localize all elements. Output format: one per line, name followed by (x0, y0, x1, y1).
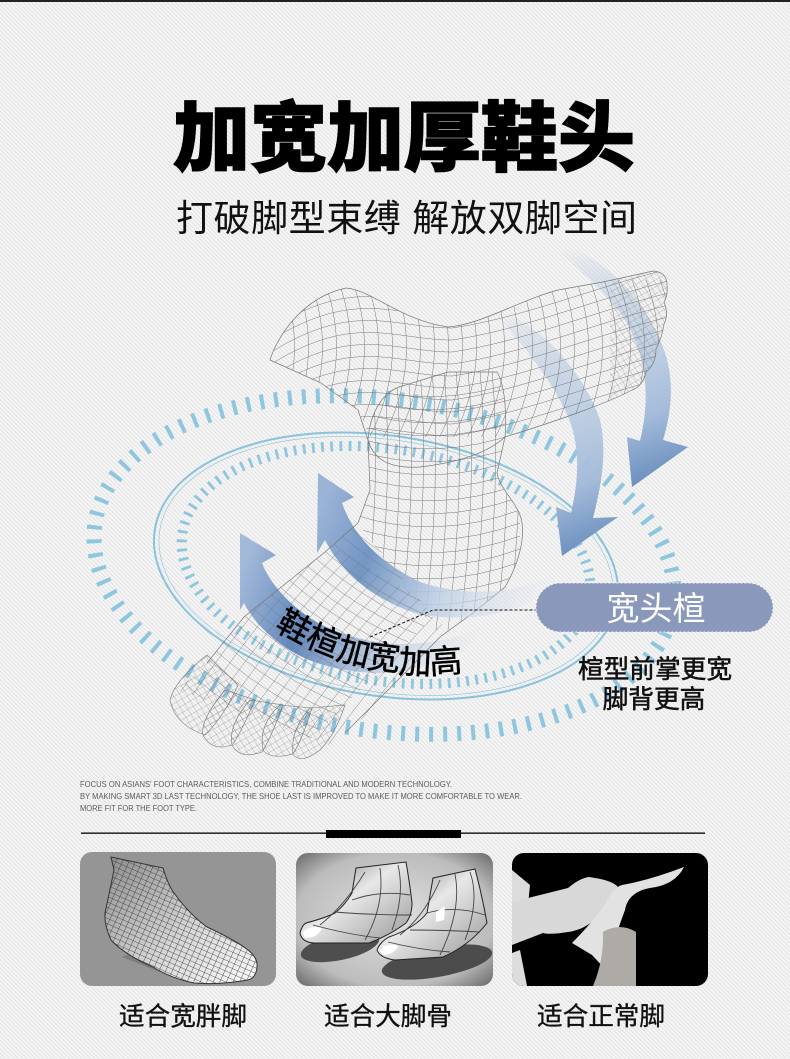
title: 加宽加厚鞋头 (173, 97, 635, 182)
panel: hand shaping last (512, 853, 708, 986)
english copy (80, 779, 522, 813)
panel: transparent boots (296, 853, 495, 986)
diagram: rings, foot, arrows (86, 254, 688, 759)
material (572, 867, 684, 970)
arrow: middle curved (317, 473, 558, 618)
callout pill: 宽头楦 (536, 583, 773, 632)
panel: wide foot last (80, 852, 276, 986)
left white strip (512, 870, 530, 986)
last shadow (122, 954, 162, 973)
arrow: lower curved (240, 533, 481, 673)
curved label: 鞋楦加宽加高: 鞋 (271, 603, 317, 651)
boot right (377, 869, 487, 960)
curved label: 鞋楦加宽加高: 加 (398, 643, 433, 682)
curved label: 鞋楦加宽加高 (271, 603, 463, 682)
boot left (300, 862, 412, 943)
caption: wide feet: 适合宽胖脚 (119, 1002, 247, 1031)
ankle outline (358, 372, 523, 637)
foot wireframe: forefoot (170, 522, 460, 759)
curved label: 鞋楦加宽加高: 宽 (365, 637, 402, 678)
caption: big bone: 适合大脚骨 (324, 1002, 452, 1031)
last shape (105, 857, 257, 984)
subtitle: 打破脚型束缚 解放双脚空间 (176, 198, 637, 239)
arm and hand (512, 877, 619, 945)
ring: outer ticks (72, 360, 696, 770)
callout description: 楦型前掌更宽 (578, 655, 732, 684)
boot shadows (300, 939, 380, 962)
caption: normal feet: 适合正常脚 (537, 1002, 665, 1031)
callout description (578, 655, 732, 714)
curved label: 鞋楦加宽加高: 加 (333, 630, 374, 674)
english copy: BY MAKING SMART 3D LAST TECHNOLOGY, THE SHOE LAST IS IMPROVED TO MAKE IT MORE COMFORTABLE TO WEAR. (80, 791, 522, 801)
curved label: 鞋楦加宽加高: 楦 (301, 617, 346, 664)
ring: inner ticks (164, 418, 608, 712)
toes (170, 655, 345, 759)
foot wireframe: upper view (270, 270, 668, 438)
arrow: outer right (542, 240, 688, 487)
forefoot outline (207, 523, 440, 733)
last pillar (593, 927, 636, 986)
ring: inner solid ellipse (135, 401, 637, 731)
arrow: inner right (489, 307, 618, 556)
callout pill: 宽头楦: 宽头楦 (606, 590, 706, 627)
foot wireframe: ankle (355, 370, 523, 637)
callout leader line (370, 610, 536, 637)
divider (81, 830, 705, 838)
top edge bar (0, 0, 790, 2)
english copy: MORE FIT FOR THE FOOT TYPE. (80, 803, 197, 813)
curved label: 鞋楦加宽加高: 高 (428, 642, 463, 681)
english copy: FOCUS ON ASIANS' FOOT CHARACTERISTICS, COMBINE TRADITIONAL AND MODERN TECHNOLOGY. (80, 779, 452, 789)
callout description: 脚背更高 (603, 685, 705, 714)
